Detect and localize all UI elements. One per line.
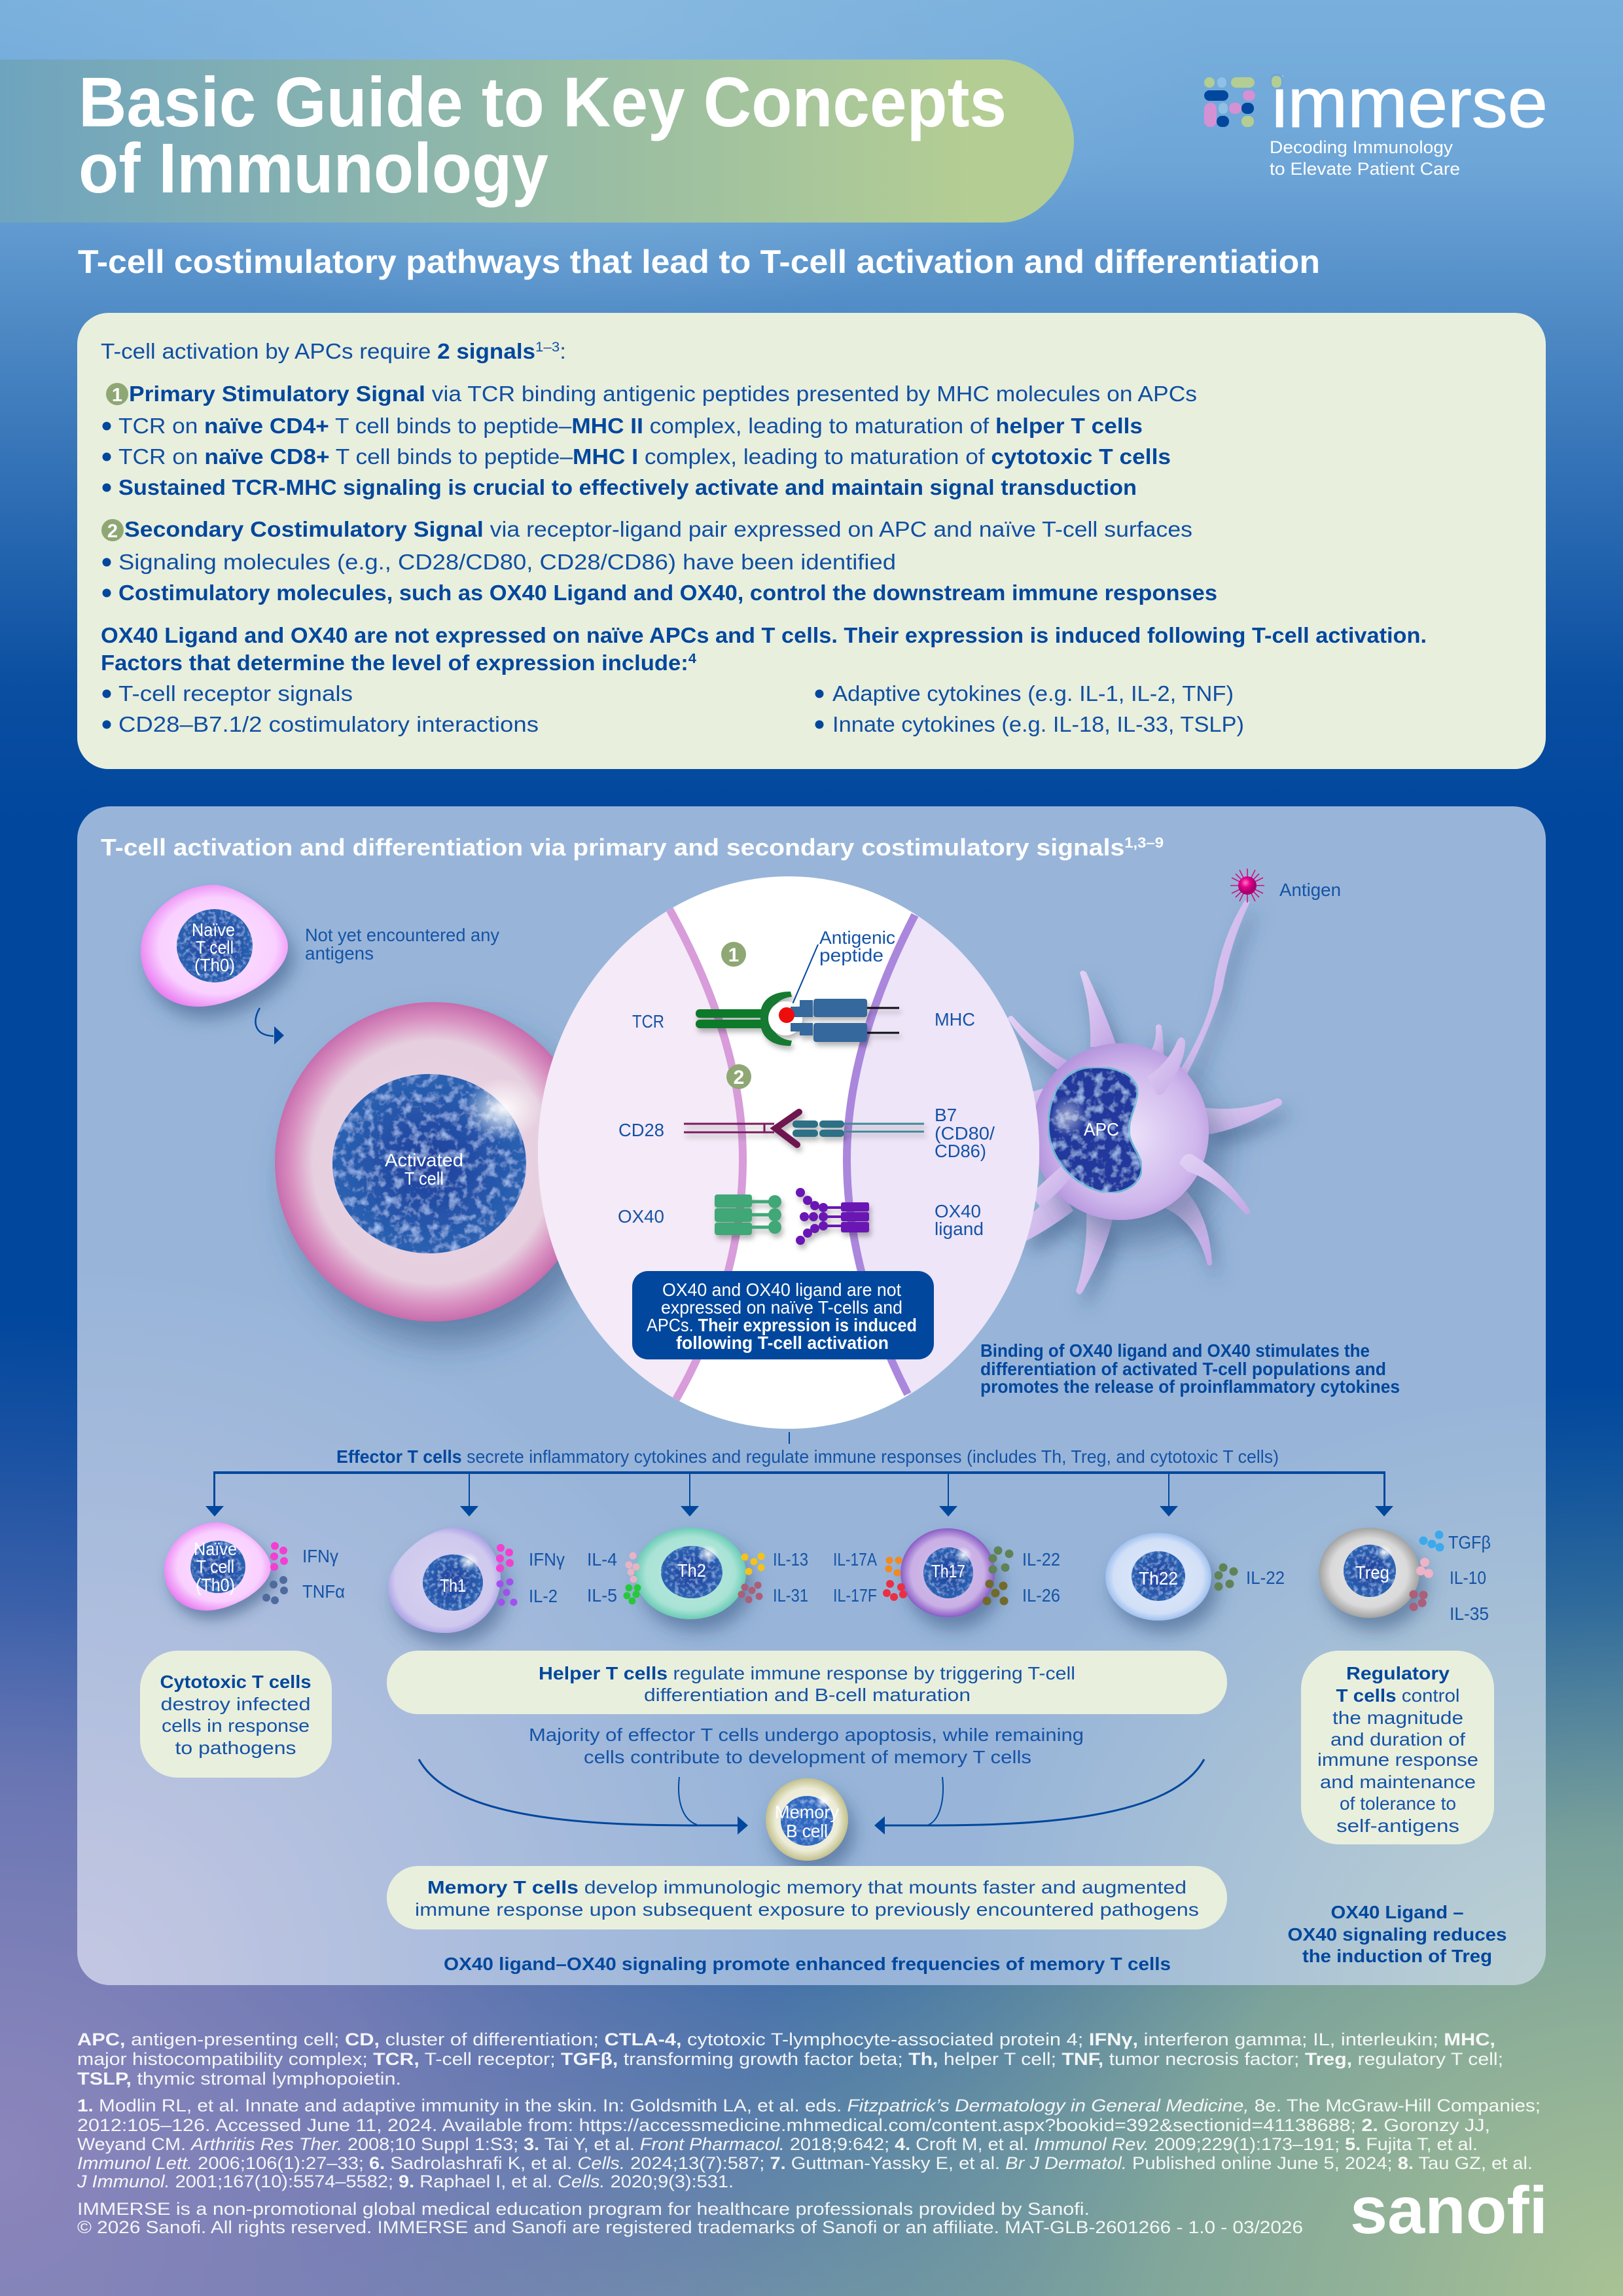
molecule: OX40 [715,1194,781,1235]
box: helper T cells: differentiation and B-cell maturation [644,1685,971,1705]
logo: sanofi: sanofi [1350,2173,1548,2248]
cell: Th17 [833,1528,1060,1617]
cell: memory cell [766,1778,848,1861]
text: OX40 reduces Treg [1288,1902,1507,1966]
box: regulatory T cells: and duration of [1330,1729,1465,1749]
callout: expression induced: OX40 and OX40 ligand are not [662,1280,901,1300]
primary signal block: TCR on naïve CD4+ T cell binds to peptide– MHC II complex, leading to maturation of helper T cells [118,414,1143,438]
footer: program statement: © 2026 Sanofi. All rights reserved. IMMERSE and Sanofi are registered trademarks of Sanofi or an affiliate. MAT-GLB-2601266 - 1.0 - 03/2026 [77,2217,1303,2237]
footer: references: 2012:105–126. Accessed June 11, 2024. Available from: https://accessmedicine.mhmedical.com/content.aspx?bookid=392&sectionid=41138688; 2. Goronzy JJ, [77,2115,1490,2135]
text: OX40 reduces Treg: OX40 Ligand – [1331,1902,1463,1922]
text: majority of effector T cells: cells contribute to development of memory T cells [584,1747,1031,1767]
secondary signal block: Secondary Costimulatory Signal via receptor-ligand pair expressed on APC and naïve T-cell surfaces [124,517,1192,541]
cell: Th1 [388,1528,565,1633]
cytokines: Th22 [1215,1563,1285,1590]
cell: Th2 [587,1528,808,1619]
labels: APC side [935,1009,995,1239]
text: not yet encountered: antigens [305,943,374,963]
cytokines: IFN gamma, TNF alpha [262,1542,345,1604]
secondary signal block: Costimulatory molecules, such as OX40 Ligand and OX40, control the downstream immune responses [118,581,1217,605]
footer: abbreviations: major histocompatibility complex; TCR, T-cell receptor; TGFβ, transforming growth factor beta; Th, helper T cell; TNF, tumor necrosis factor; Treg, regulatory T cell; [77,2049,1503,2069]
cytokines: Th17: IL-17F [833,1585,877,1605]
primary signal block [102,382,1197,499]
cell: naive T cell [141,885,288,1007]
callout: expression induced: APCs. Their expression is induced [647,1315,917,1335]
cell: cytotoxic precursor (naive) [164,1522,345,1611]
dendrites [1008,901,1282,1295]
cell: naive T cell: T cell [196,937,234,958]
box: cytotoxic T cells: Cytotoxic T cells [160,1672,312,1692]
box: cytotoxic T cells: destroy infected [161,1694,310,1714]
callout: expression induced: expressed on naïve T-cells and [661,1297,902,1318]
box: regulatory T cells: T cells control [1336,1685,1459,1706]
labels: APC side: ligand [935,1219,984,1239]
text: effector T cells: Effector T cells secrete inflammatory cytokines and regulate immune responses (includes Th, Treg, and cytotoxic T cells) [336,1446,1279,1467]
cytokines: Th17: IL-22 [1022,1549,1060,1570]
badge 2 [726,1064,751,1089]
footer: abbreviations: APC, antigen-presenting cell; CD, cluster of differentiation; CTLA-4, cytotoxic T-lymphocyte-associated protein 4; IFNγ, interferon gamma; IL, interleukin; MHC, [77,2030,1495,2049]
text: OX40 reduces Treg: OX40 signaling reduces [1288,1924,1507,1945]
text: binding of OX40 ligand: differentiation of activated T-cell populations and [980,1359,1386,1379]
molecule: TCR-MHC [696,992,899,1046]
box: memory T cells [387,1866,1227,1929]
box: cytotoxic T cells [140,1651,332,1778]
OX40 expression factors: CD28–B7.1/2 costimulatory interactions [118,712,539,736]
nucleus [1048,1067,1142,1193]
arrow: naive to activated [255,1008,284,1045]
cell: Th22: Th22 [1139,1568,1178,1588]
secondary signal block [101,517,1217,605]
labels: APC side: B7 [935,1105,957,1125]
labels: APC side: (CD80/ [935,1123,995,1143]
OX40 expression factors: T-cell receptor signals [118,681,353,706]
box: regulatory T cells: and maintenance [1320,1772,1476,1792]
cell: Treg [1319,1528,1491,1624]
footer: references: 1. Modlin RL, et al. Innate and adaptive immunity in the skin. In: Goldsmith LA, et al. eds. Fitzpatrick’s Dermatology in General Medicine, 8e. The McGraw-Hill Companies; [77,2096,1541,2115]
text: binding of OX40 ligand: promotes the release of proinflammatory cytokines [980,1376,1400,1397]
cell: cytotoxic precursor (naive): Naïve [194,1539,237,1559]
box: regulatory T cells: of tolerance to [1340,1793,1456,1814]
cytokines: Treg: IL-10 [1450,1568,1486,1588]
subtitle: T-cell costimulatory pathways that lead to T-cell activation and differentiation [78,243,1320,280]
footer: references: J Immunol. 2001;167(10):5574–5582; 9. Raphael I, et al. Cells. 2020;9(3):531. [77,2172,734,2191]
text: majority of effector T cells [529,1725,1084,1767]
cell: Treg: Treg [1355,1562,1389,1583]
cytokines: Th17: IL-26 [1022,1585,1060,1605]
footer: references: Immunol Lett. 2006;106(1):27–33; 6. Sadrolashrafi K, et al. Cells. 2024;13(7):587; 7. Guttman-Yassky E, et al. Br J Dermatol. Published online June 5, 2024; 8. Tau GZ, et al. [77,2153,1533,2173]
cell: antigen-presenting cell: APC [1084,1119,1119,1139]
OX40 expression factors: Factors that determine the level of expression include: [101,651,661,675]
labels: T cell side: OX40 [618,1206,664,1227]
cell: Th17: Th17 [931,1561,965,1581]
primary signal block: TCR on naïve CD8+ T cell binds to peptide– MHC I complex, leading to maturation of cytotoxic T cells [118,444,1171,469]
arrows: to memory cell [419,1759,1204,1835]
panel: T-cell activation signals [77,313,1546,769]
labels: T cell side: TCR [632,1011,664,1031]
box: helper T cells: Helper T cells regulate immune response by triggering T-cell [539,1663,1075,1683]
OX40 expression factors: Adaptive cytokines (e.g. IL-1, IL-2, TNF) [832,681,1234,706]
text: not yet encountered: Not yet encountered any [305,925,499,945]
intro sentence: 1–3 [535,340,560,355]
OX40 expression factors [101,623,1427,736]
cell: cytotoxic precursor (naive): (Th0) [196,1575,235,1595]
logo: immerse: immerse [1272,63,1548,142]
icon: immerse mark [1204,73,1283,127]
cell: Th1: Th1 [440,1575,466,1596]
secondary signal block: Signaling molecules (e.g., CD28/CD80, CD28/CD86) have been identified [118,550,896,574]
callout: expression induced [632,1271,934,1359]
cytokines: Th1: IFNγ [529,1549,565,1570]
footer: abbreviations [77,2030,1503,2089]
cytokines: Th1 [496,1544,565,1606]
molecule: CD28-B7 [684,1112,924,1145]
cytokines: Th1: IL-2 [529,1586,558,1606]
central synapse circle [538,876,1039,1429]
labels: T cell side [618,1011,664,1227]
cytokines: IFN gamma, TNF alpha: IFNγ [302,1546,338,1566]
box: memory T cells: Memory T cells develop immunologic memory that mounts faster and augmented [427,1877,1186,1897]
cell: naive T cell: Naïve [192,920,235,940]
box: cytotoxic T cells: to pathogens [175,1738,296,1758]
OX40 expression factors: Innate cytokines (e.g. IL-18, IL-33, TSLP) [832,712,1244,736]
cytokines: Th2: IL-31 [773,1585,808,1605]
footer: references [77,2096,1541,2191]
cell: memory cell: B cell [786,1821,828,1841]
box: regulatory T cells: Regulatory [1346,1663,1450,1683]
cytokines: Th22: IL-22 [1246,1568,1285,1588]
molecule: OX40 ligand [796,1188,869,1245]
tagline: Decoding Immunology [1270,137,1454,157]
footer: abbreviations: TSLP, thymic stromal lymphopoietin. [77,2069,401,2089]
cytokines: Th2: IL-5 [587,1585,617,1605]
cytokines: Th17 [833,1546,1060,1605]
primary signal block: 1 [112,385,122,406]
box: regulatory T cells: the magnitude [1332,1708,1463,1728]
box: cytotoxic T cells: cells in response [162,1715,310,1736]
box: regulatory T cells [1301,1651,1494,1844]
cell: activated T cell: Activated [385,1150,463,1170]
footer: program statement: IMMERSE is a non-promotional global medical education program for healthcare professionals provided by Sanofi. [77,2199,1090,2219]
cell: antigen-presenting cell [1008,901,1282,1295]
box: memory T cells: immune response upon subsequent exposure to previously encountered pathogens [415,1899,1199,1920]
cytokines: Treg [1410,1530,1491,1624]
text: binding of OX40 ligand: Binding of OX40 ligand and OX40 stimulates the [980,1340,1370,1361]
footer: references: Weyand CM. Arthritis Res Ther. 2008;10 Suppl 1:S3; 3. Tai Y, et al. Front Pharmacol. 2018;9:642; 4. Croft M, et al. Immunol Rev. 2009;229(1):173–191; 5. Fujita T, et al. [77,2134,1478,2154]
cytokines: Th2: IL-4 [587,1549,617,1570]
cell: Th22 [1105,1533,1285,1621]
cell: cytotoxic precursor (naive): T cell [196,1556,234,1577]
primary signal block: Sustained TCR-MHC signaling is crucial to effectively activate and maintain signal transduction [118,475,1137,499]
box: regulatory T cells: immune response [1317,1749,1478,1770]
footer: program statement [77,2199,1303,2237]
labels: APC side: CD86) [935,1141,986,1161]
cell: memory cell: Memory [775,1802,839,1822]
title: of Immunology [79,128,548,207]
cytokines: Treg: TGFβ [1448,1532,1491,1552]
cell: activated T cell: T cell [404,1168,444,1189]
title [79,62,1007,207]
tagline [1270,137,1460,179]
intro sentence: T-cell activation by APCs require 2 signals [101,339,529,363]
badge 2: 2 [734,1067,744,1088]
labels: APC side: OX40 [935,1201,981,1221]
box: helper T cells [387,1651,1227,1714]
badge 1: 1 [728,944,739,966]
text: majority of effector T cells: Majority of effector T cells undergo apoptosis, while remaining [529,1725,1084,1745]
text: binding of OX40 ligand [980,1340,1400,1397]
logo: immerse [1204,63,1548,179]
box: regulatory T cells: self-antigens [1336,1816,1459,1836]
antigen [1230,869,1341,903]
secondary signal block: 2 [107,521,118,542]
cell: activated T cell [275,1002,592,1321]
callout: expression induced: following T-cell activation [676,1333,889,1353]
cytokines: Th2 [587,1549,808,1605]
cytokines: Th17: IL-17A [833,1549,877,1570]
panel heading: 1,3–9 [1124,834,1164,851]
text: not yet encountered [305,925,499,963]
text: OX40 reduces Treg: the induction of Treg [1302,1946,1492,1966]
text: OX40 promotes memory T cells: OX40 ligand–OX40 signaling promote enhanced frequencies of memory T cells [444,1954,1171,1974]
cytokines: IFN gamma, TNF alpha: TNFα [302,1581,345,1602]
tagline: to Elevate Patient Care [1270,159,1460,179]
antigen: Antigen [1279,880,1341,900]
labels: T cell side: CD28 [618,1120,664,1140]
cytokines: Treg: IL-35 [1450,1604,1489,1624]
cell: naive T cell: (Th0) [194,955,235,975]
label: antigenic peptide: Antigenic [819,927,895,948]
cytokines: Th2: IL-13 [773,1549,808,1570]
label: antigenic peptide [791,927,895,1009]
intro sentence: : [560,339,566,363]
panel heading: T-cell activation and differentiation via primary and secondary costimulatory signals [101,834,1043,861]
title: Basic Guide to Key Concepts [79,62,1007,141]
cell: Th2: Th2 [677,1560,706,1581]
labels: APC side: MHC [935,1009,975,1030]
badge 1 [721,942,746,967]
panel: activation and differentiation diagram [77,806,1546,1985]
primary signal block: Primary Stimulatory Signal via TCR binding antigenic peptides presented by MHC molecules on APCs [129,382,1197,406]
arrows: effector branching [205,1471,1393,1516]
label: antigenic peptide: peptide [819,945,883,965]
OX40 expression factors: 4 [688,651,696,666]
OX40 expression factors: OX40 Ligand and OX40 are not expressed on naïve APCs and T cells. Their expression is induced following T-cell activation. [101,623,1427,647]
header: title banner [0,60,1074,223]
